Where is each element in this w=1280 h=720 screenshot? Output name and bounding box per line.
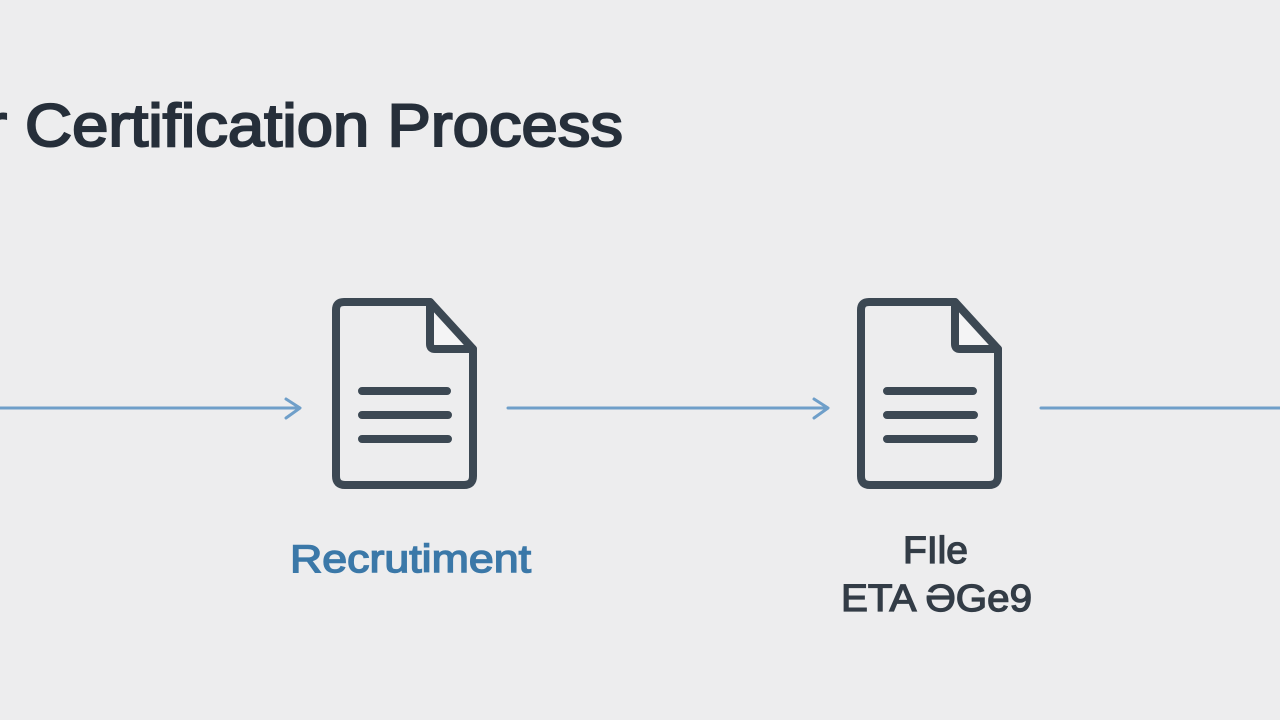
label: recruitment: Recrutiment xyxy=(290,538,531,581)
label: file: FIle xyxy=(903,530,968,572)
label: file: ETA ƏGe9 xyxy=(841,578,1032,620)
arrow: recruitment to file xyxy=(508,399,828,418)
icon: file document xyxy=(861,302,998,485)
arrow: into recruitment xyxy=(0,399,300,418)
label: file xyxy=(841,530,1032,620)
icon: recruitment document xyxy=(336,302,473,485)
title: Certification Process xyxy=(25,92,623,159)
arrow: onward from file xyxy=(1041,406,1280,410)
